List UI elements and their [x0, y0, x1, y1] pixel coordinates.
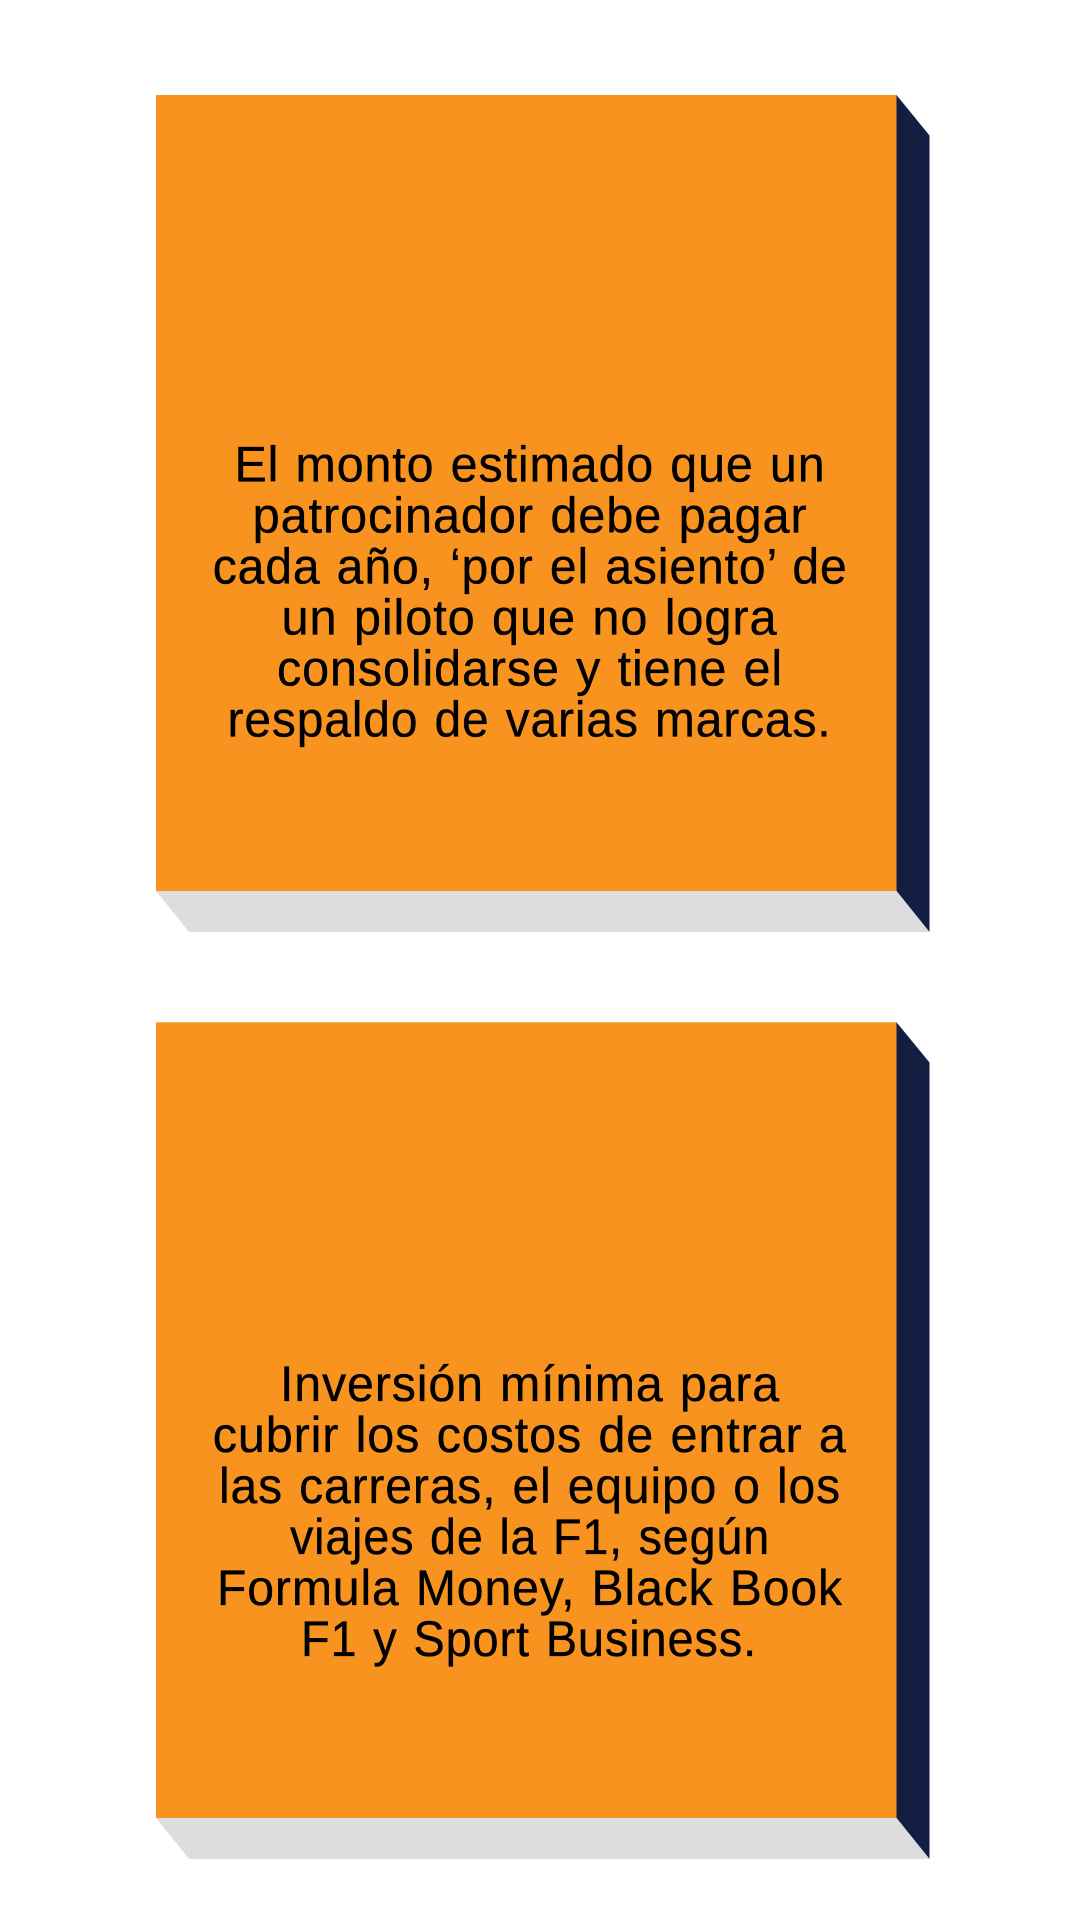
- text block: minimum investment description: [213, 1356, 847, 1667]
- text block: minimum investment description: cubrir los costos de entrar a: [213, 1407, 847, 1463]
- text block: sponsor seat description: consolidarse y tiene el: [277, 641, 783, 697]
- text block: minimum investment description: las carreras, el equipo o los: [219, 1458, 841, 1514]
- text block: minimum investment description: viajes de la F1, según: [290, 1509, 770, 1565]
- panel bottom: grey bevel: [156, 1818, 930, 1859]
- panel side: navy bevel: [896, 1022, 930, 1859]
- panel bottom: grey bevel: [156, 891, 930, 932]
- text block: minimum investment description: Formula Money, Black Book: [217, 1560, 843, 1616]
- text block: sponsor seat description: respaldo de varias marcas.: [228, 692, 832, 748]
- text block: minimum investment description: Inversión mínima para: [280, 1356, 780, 1412]
- text block: sponsor seat description: cada año, ‘por el asiento’ de: [213, 539, 848, 595]
- text block: minimum investment description: F1 y Sport Business.: [301, 1611, 757, 1667]
- text block: sponsor seat description: patrocinador debe pagar: [253, 488, 808, 544]
- panel side: navy bevel: [896, 95, 930, 932]
- panel: minimum investment: [156, 1022, 930, 1859]
- panel face: orange square: [156, 1022, 896, 1818]
- text block: sponsor seat description: [213, 437, 848, 748]
- text block: sponsor seat description: un piloto que no logra: [282, 590, 778, 646]
- text block: sponsor seat description: El monto estimado que un: [234, 437, 826, 493]
- panel: sponsor seat cost: [156, 95, 930, 932]
- panel face: orange square: [156, 95, 896, 891]
